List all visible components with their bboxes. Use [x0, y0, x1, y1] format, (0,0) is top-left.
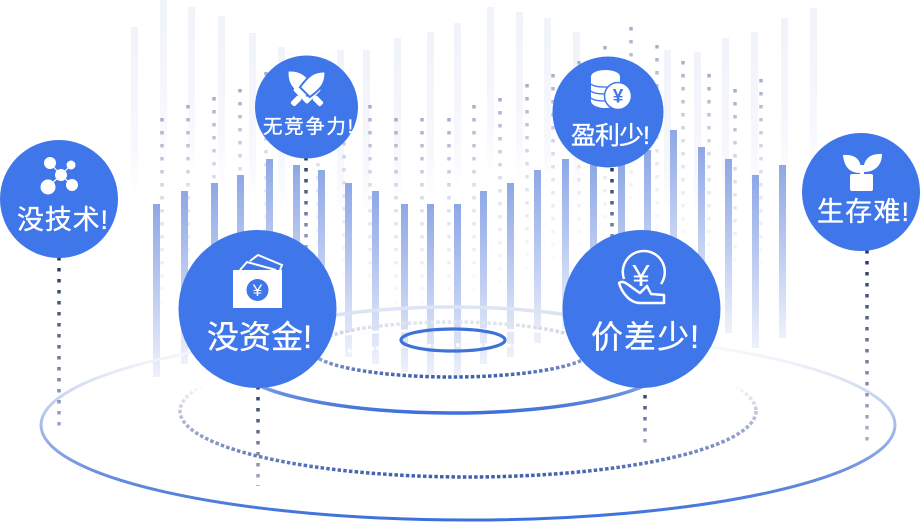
dotted stem: 没资金 [256, 386, 260, 486]
icon: crossed swords [282, 65, 332, 112]
label: 没资金! [207, 319, 312, 355]
label: 没技术! [17, 205, 108, 235]
callout: 没资金 [178, 230, 336, 388]
concentric rings [41, 307, 895, 520]
callout: 无竞争力 [255, 56, 358, 158]
dotted background columns [162, 27, 761, 308]
icon: coin in hand [619, 251, 665, 303]
dotted stem: 无竞争力 [304, 157, 308, 257]
icon: wallet with cash [233, 255, 282, 308]
label: 盈利少! [571, 122, 650, 150]
dotted stem: 没技术 [57, 257, 61, 427]
callout: 生存难 [802, 133, 920, 251]
icon: coins: ¥ [613, 86, 624, 108]
icon: molecule [40, 157, 78, 194]
dotted stem: 价差少 [643, 384, 647, 444]
icon: wallet with cash: ¥ [252, 281, 263, 300]
faint background bars [131, 0, 817, 222]
label: 价差少! [591, 319, 699, 355]
callout: 盈利少 [552, 56, 664, 168]
callout: 价差少 [562, 230, 720, 388]
bar chart [153, 130, 786, 378]
label: 生存难! [817, 197, 909, 227]
callout: 没技术 [0, 140, 118, 258]
label: 无竞争力! [263, 116, 353, 138]
icon: coin in hand: ¥ [631, 258, 650, 293]
dotted stem: 盈利少 [610, 168, 614, 240]
dotted stem: 生存难 [865, 250, 869, 442]
icon: potted sprout [843, 154, 882, 191]
